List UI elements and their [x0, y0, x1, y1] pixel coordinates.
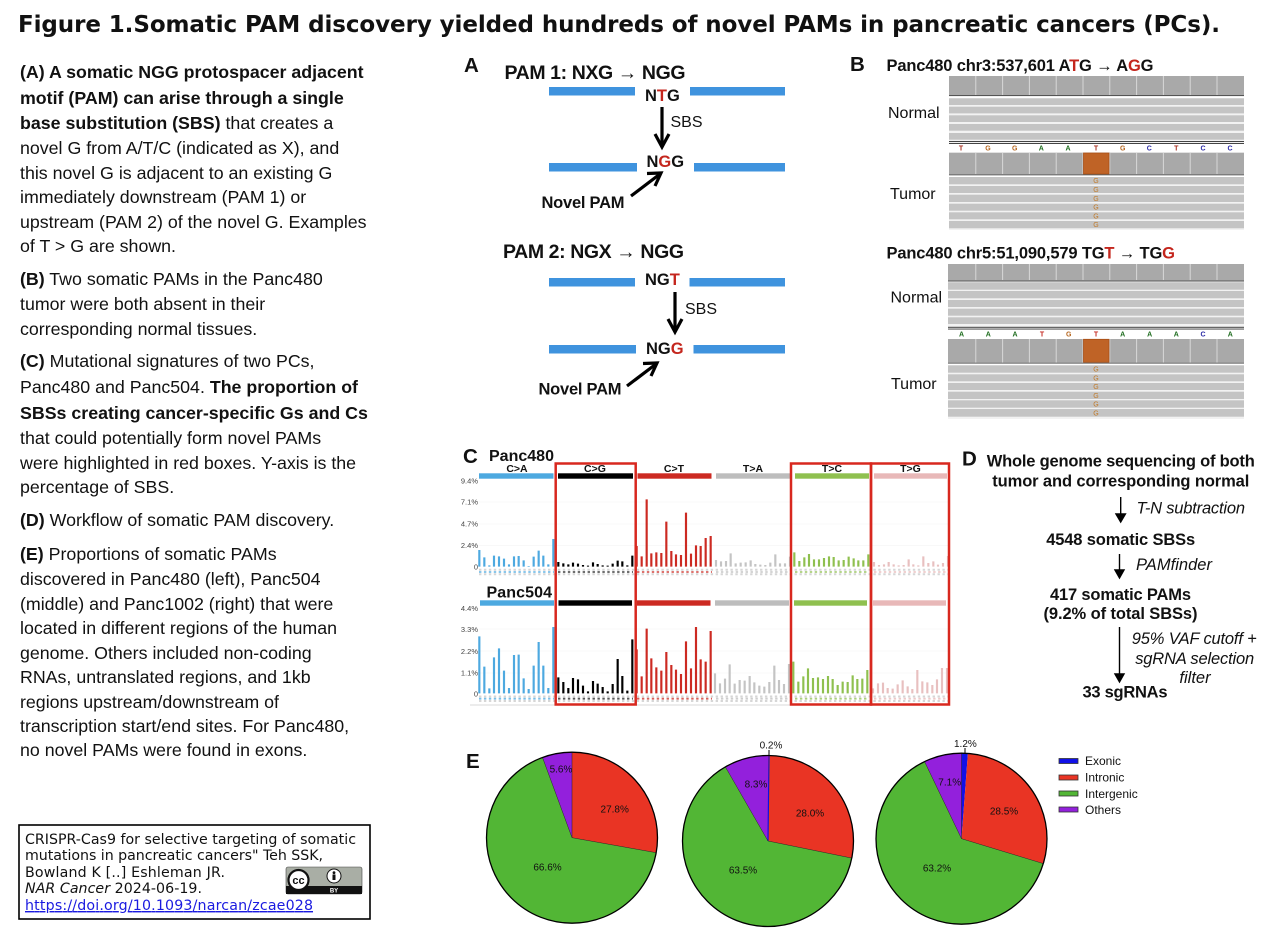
legend [1059, 754, 1138, 817]
IGV track 2: G [1093, 375, 1099, 382]
IGV track 2: A [1147, 332, 1152, 338]
citation box: Bowland K [..] Eshleman JR. [25, 865, 225, 881]
pie: Panc480: 27.8% [601, 804, 629, 816]
y axis labels: 0 [474, 562, 478, 572]
y axis labels: 4.4% [461, 604, 478, 613]
arrow: T-N subtraction [1116, 497, 1125, 522]
step: whole genome sequencing [987, 452, 1255, 490]
IGV track 2: T [1094, 332, 1099, 338]
citation box: CRISPR-Cas9 for selective targeting of somatic [25, 832, 356, 848]
legend E: (E) Proportions of somatic PAMs [20, 544, 277, 564]
label Normal: Normal [888, 105, 940, 122]
IGV track 1: T [1174, 146, 1179, 152]
Panc504 T>G [873, 668, 947, 693]
label SBS: SBS [685, 301, 717, 318]
pie: Panc504: 8.3% [745, 780, 768, 790]
y axis labels: 1.1% [461, 668, 478, 678]
legend: Exonic [1085, 754, 1121, 768]
pie: Panc480: 66.6% [533, 862, 562, 874]
heading Panc504: Panc504 [486, 584, 552, 602]
IGV track 1: C [1227, 146, 1233, 152]
title: Figure 1.Somatic PAM discovery yielded hundreds of novel PAMs in pancreatic cancers (PCs). [18, 12, 1220, 38]
category labels: C>T [664, 463, 685, 475]
pie: Panc504: 63.5% [729, 866, 757, 876]
Panc480 T>C [794, 552, 868, 567]
Panc504 T>A [715, 664, 789, 693]
pie: Panc1002: 28.5% [990, 806, 1018, 818]
IGV track 1: G [1120, 146, 1126, 152]
IGV track 1: G [1093, 196, 1099, 203]
legend E: regions upstream/downstream of [20, 692, 279, 712]
pie: Panc504 [682, 740, 854, 927]
legend B [20, 269, 323, 339]
label filter: sgRNA selection [1135, 650, 1254, 668]
icon: CC BY license badge [286, 867, 362, 894]
text block: figure legend [19, 62, 368, 760]
label B: B [850, 53, 865, 76]
Panc504 T>C [793, 662, 867, 693]
y axis labels: 0 [474, 690, 478, 698]
Panc480 C>G [558, 556, 632, 567]
legend E: transcription start/end sites. For Panc480, [20, 716, 349, 736]
pie: Panc480 [486, 752, 658, 923]
IGV track 2: G [1093, 402, 1099, 408]
legend C: Panc480 and Panc504. The proportion of [20, 377, 358, 397]
IGV track 2: A [1012, 332, 1018, 338]
panel D: workflow [962, 448, 1257, 702]
label Tumor: Tumor [891, 376, 937, 393]
sequence NGG: NGG [646, 153, 684, 171]
y axis labels: 4.7% [461, 520, 478, 528]
IGV track 1: G [985, 146, 991, 152]
step: 417 somatic PAMs: (9.2% of total SBSs) [1044, 605, 1198, 623]
label filter [1132, 630, 1257, 687]
Panc480 T>A [716, 553, 790, 567]
label E: E [466, 750, 480, 773]
step: 4548 somatic SBSs: 4548 somatic SBSs [1046, 531, 1195, 549]
legend A: novel G from A/T/C (indicated as X), and [20, 138, 339, 158]
icon: CC BY license badge: BY [330, 888, 338, 894]
arrow: novel PAM [627, 363, 657, 386]
arrow: SBS [655, 107, 669, 147]
category labels: C>G [584, 463, 606, 475]
category labels: T>C [822, 463, 842, 475]
legend E: RNAs, untranslated regions, and 1kb [20, 667, 311, 687]
IGV track 2: G [1093, 410, 1099, 417]
red highlight boxes [556, 464, 949, 704]
legend C: percentage of SBS. [20, 477, 174, 497]
y axis labels: 9.4% [461, 476, 478, 486]
IGV track 2: A [1174, 332, 1179, 338]
IGV track 2: T [1040, 332, 1045, 338]
DNA strands [549, 87, 785, 354]
Panc504 C>A [479, 627, 553, 693]
label SBS: SBS [670, 114, 703, 131]
legend C: that could potentially form novel PAMs [20, 428, 321, 448]
label A: A [464, 54, 479, 77]
arrow: filter [1115, 627, 1124, 682]
label D: D [962, 448, 977, 470]
pie: Panc504: 28.0% [796, 808, 824, 820]
IGV track 2: A [986, 332, 991, 338]
legend A: upstream (PAM 2) of the novel G. Examples [20, 212, 367, 232]
legend B: (B) Two somatic PAMs in the Panc480 [20, 269, 323, 289]
step: whole genome sequencing: tumor and corresponding normal [992, 472, 1249, 490]
label Novel PAM: Novel PAM [538, 380, 622, 398]
label filter: 95% VAF cutoff + [1132, 630, 1257, 648]
Panc504 C>G [558, 639, 632, 693]
category labels [506, 463, 921, 475]
legend B: tumor were both absent in their [20, 294, 265, 314]
IGV track 2: G [1093, 366, 1099, 374]
legend D: (D) Workflow of somatic PAM discovery. [20, 510, 334, 530]
IGV track 1: A [1039, 146, 1044, 152]
IGV track 2: G [1093, 393, 1099, 400]
Panc480 C>T [637, 499, 711, 567]
IGV track 2: A [1228, 332, 1233, 338]
legend C: were highlighted in red boxes. Y-axis is the [19, 453, 356, 473]
citation box [19, 825, 370, 919]
label Novel PAM: Novel PAM [542, 194, 624, 212]
step: 417 somatic PAMs [1044, 586, 1198, 623]
legend C [19, 351, 368, 497]
legend E: discovered in Panc480 (left), Panc504 [20, 569, 321, 589]
y axis labels: 2.2% [461, 647, 478, 656]
label PAMfinder: PAMfinder [1136, 556, 1214, 574]
y axis labels: 2.4% [461, 541, 478, 550]
panel A: PAM schematic [464, 54, 785, 398]
IGV track 1: C [1200, 146, 1206, 152]
legend C: SBSs creating cancer-specific Gs and Cs [20, 403, 368, 423]
Panc480 T>G [874, 556, 948, 567]
label C: C [463, 445, 478, 468]
IGV track 2 [948, 264, 1244, 419]
category labels: T>G [900, 463, 921, 475]
IGV track 1 [949, 76, 1244, 230]
pie: Panc1002 [876, 739, 1047, 924]
arrow: novel PAM [631, 173, 661, 196]
y axis labels [461, 476, 478, 698]
PAM 2 heading: PAM 2: NGX → NGG [503, 241, 684, 263]
heading Panc480: Panc480 [489, 448, 554, 465]
pie: Panc504: 0.2% [760, 740, 783, 752]
y axis labels: 7.1% [461, 498, 478, 506]
IGV track 2: G [1093, 384, 1099, 391]
step: 33 sgRNAs: 33 sgRNAs [1082, 684, 1168, 702]
legend E [20, 544, 349, 760]
arrow: SBS [668, 292, 682, 332]
legend: Others [1085, 803, 1121, 817]
legend A: base substitution (SBS) that creates a [20, 113, 333, 133]
legend E: located in different regions of the human [20, 618, 337, 638]
label Normal: Normal [890, 290, 942, 306]
IGV track 2: A [959, 332, 964, 338]
IGV track 1: T [1094, 146, 1099, 152]
step: 417 somatic PAMs: 417 somatic PAMs [1050, 586, 1191, 604]
IGV track 1: G [1093, 205, 1099, 212]
pie: Panc1002: 1.2% [954, 739, 977, 750]
tick labels [479, 570, 948, 701]
legend E: genome. Others included non-coding [20, 643, 312, 663]
IGV track 1: G [1012, 146, 1018, 152]
IGV track 2: A [1120, 332, 1125, 338]
sequence NGT: NGT [645, 271, 680, 289]
IGV track 1: T [959, 146, 964, 152]
label filter: filter [1179, 669, 1212, 687]
legend A: motif (PAM) can arise through a single [20, 88, 344, 108]
category bars [479, 473, 947, 606]
icon: CC BY license badge: cc [292, 875, 305, 887]
category labels: T>A [743, 463, 763, 475]
pie: Panc480: 5.6% [550, 764, 573, 776]
legend C: (C) Mutational signatures of two PCs, [20, 351, 314, 371]
Panc480 C>A [479, 539, 553, 567]
legend B: corresponding normal tissues. [20, 319, 257, 339]
legend A: (A) A somatic NGG protospacer adjacent [20, 62, 364, 82]
IGV track 1: G [1093, 222, 1099, 229]
IGV track 1: C [1147, 146, 1152, 152]
legend: Intergenic [1085, 787, 1138, 801]
label T-N subtraction: T-N subtraction [1136, 500, 1245, 518]
legend A: of T > G are shown. [20, 236, 176, 256]
label Tumor: Tumor [890, 186, 936, 203]
category labels: C>A [506, 463, 528, 475]
legend: Intronic [1085, 770, 1124, 784]
citation box: https://doi.org/10.1093/narcan/zcae028 [25, 898, 313, 914]
pie: Panc1002: 63.2% [923, 864, 951, 874]
pie: Panc1002: 7.1% [938, 778, 961, 788]
sequence NGG: NGG [646, 340, 684, 358]
bars: Panc480 and Panc504 [479, 499, 948, 693]
citation box: NAR Cancer 2024-06-19. [25, 881, 202, 897]
citation box: mutations in pancreatic cancers" Teh SSK, [25, 848, 323, 864]
Panc504 C>T [637, 627, 711, 693]
legend A: this novel G is adjacent to an existing G [20, 163, 332, 183]
panel C: mutational signatures [461, 445, 949, 705]
IGV 2 heading: Panc480 chr5:51,090,579 TGT → TGG [886, 244, 1175, 262]
sequence NTG: NTG [645, 87, 680, 105]
IGV track 1: G [1093, 213, 1099, 220]
legend A [20, 62, 367, 256]
arrow: PAMfinder [1115, 554, 1124, 578]
legend A: immediately downstream (PAM 1) or [20, 187, 306, 207]
IGV track 2: C [1200, 332, 1206, 338]
step: whole genome sequencing: Whole genome sequencing of both [987, 452, 1255, 470]
PAM 1 heading: PAM 1: NXG → NGG [504, 62, 686, 84]
y axis labels: 3.3% [461, 625, 478, 634]
IGV track 1: A [1065, 146, 1071, 152]
legend E: no novel PAMs were found in exons. [20, 740, 307, 760]
panel B: IGV read views [850, 53, 1244, 419]
IGV 1 heading: Panc480 chr3:537,601 ATG → AGG [886, 57, 1154, 75]
legend E: (middle) and Panc1002 (right) that were [20, 594, 333, 614]
panel E: pie charts [466, 739, 1138, 927]
IGV track 1: G [1093, 178, 1099, 185]
IGV track 2: G [1066, 332, 1072, 338]
IGV track 1: G [1093, 187, 1099, 194]
